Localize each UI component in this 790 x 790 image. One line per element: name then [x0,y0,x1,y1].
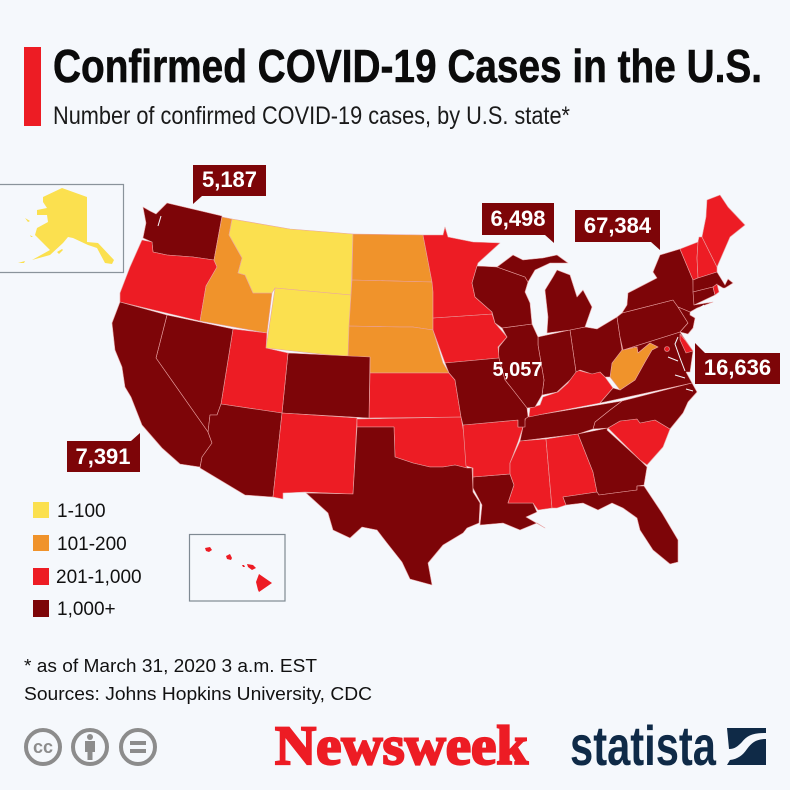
callout: California 7,391 [67,433,140,472]
state: Vermont [680,242,698,280]
state: Kansas [369,373,461,418]
inset: Hawaii [190,534,285,601]
sources: Sources: Johns Hopkins University, CDC [24,684,372,704]
state: Georgia [578,428,647,495]
state: Wisconsin [472,266,532,328]
state: New Mexico [273,413,357,499]
state: Kentucky [529,370,613,417]
state: Alaska [18,188,114,264]
icon: no derivatives [121,730,155,764]
map of U.S. states [112,195,745,585]
state: Florida [563,486,678,564]
state: California [112,302,212,467]
Chesapeake Bay and coastal inlets [158,216,704,391]
state: Arkansas [463,420,523,477]
legend [33,501,142,620]
subtitle: Number of confirmed COVID-19 cases, by U.S. state* [53,102,570,130]
icon: statista mark [727,728,766,765]
icon: creative commons: cc [33,737,53,757]
state: Connecticut [693,287,715,305]
state: Louisiana [473,468,545,530]
icon: attribution [73,730,107,764]
state: South Dakota [349,280,433,330]
legend item: 101-200: 101-200 [57,534,127,555]
callout: New York 67,384: 67,384 [584,213,652,238]
state: Tennessee [520,401,622,441]
state: Idaho [200,217,272,333]
state: Colorado [282,353,370,418]
statista logo: statista [570,714,717,777]
Newsweek logo: Newsweek [275,715,528,776]
state: Nevada [156,315,233,432]
inset: Alaska [0,184,124,272]
state: Massachusetts [693,272,733,292]
state: Utah [221,329,288,413]
icon: creative commons [26,730,60,764]
label: Illinois 5,057: 5,057 [492,359,543,381]
callout: Washington 5,187: 5,187 [202,167,257,192]
state: Missouri [445,358,528,427]
callout: New Jersey 16,636: 16,636 [704,355,771,380]
state: New Hampshire [697,237,717,278]
state: Minnesota [423,227,500,318]
state: Nebraska [348,326,449,373]
callout: Washington 5,187 [193,165,266,204]
state: Oklahoma [357,417,467,468]
state: Washington [143,203,222,260]
state: Michigan [497,255,592,333]
state: Iowa [433,314,507,363]
callout: Michigan 6,498 [482,203,554,243]
callout: New Jersey 16,636 [695,343,780,384]
state: Montana [229,219,353,295]
state: Arizona [200,404,282,497]
state: Alabama [546,434,597,508]
state: South Carolina [608,419,670,465]
state: Pennsylvania [617,300,688,350]
state: District of Columbia [664,346,670,352]
legend item: 1,000+: 1,000+ [57,599,116,620]
callout: California 7,391: 7,391 [75,444,131,469]
state: Rhode Island [713,284,719,295]
state: Texas [306,427,480,585]
Hawaii inset box [190,534,285,601]
state: West Virginia [610,337,658,390]
Alaska inset box [0,184,124,272]
footnote: * as of March 31, 2020 3 a.m. EST [24,656,317,676]
callout: Michigan 6,498: 6,498 [490,206,546,231]
state: North Carolina [593,383,697,429]
title accent bar [24,47,41,126]
legend item: 201-1,000: 201-1,000 [56,567,142,588]
state: Delaware [680,334,693,353]
state: Ohio [570,317,622,377]
state: Oregon [120,240,217,321]
state: Indiana [538,330,576,395]
state: New Jersey [678,307,695,334]
state: Maine [702,195,745,267]
callout: New York 67,384 [575,210,660,250]
state: Mississippi [508,439,552,510]
state: Hawaii [205,547,272,592]
state: Virginia and Maryland [600,332,693,403]
state: North Dakota [352,234,432,282]
legend item: 1-100: 1-100 [57,501,106,522]
state: Wyoming [266,288,351,357]
state: New York [622,249,713,313]
state: Illinois [498,324,544,408]
